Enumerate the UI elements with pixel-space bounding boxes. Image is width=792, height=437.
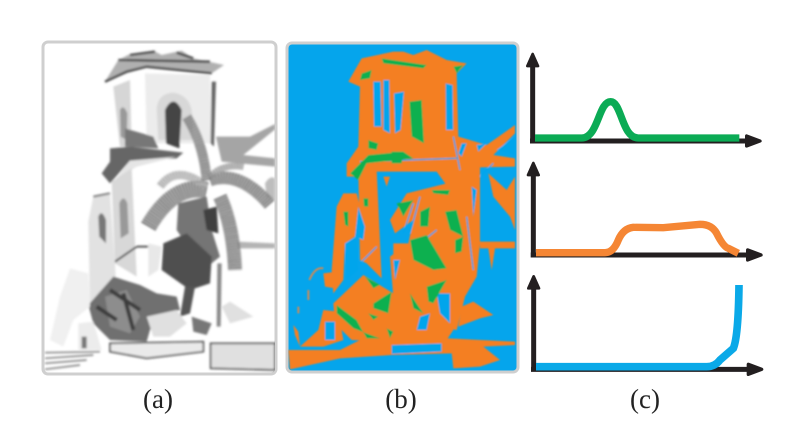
panel a: grayscale watercolor of church tower and palm bbox=[43, 42, 276, 374]
label b: (b) bbox=[385, 384, 417, 414]
chart: blue rising curve on axes bbox=[528, 276, 762, 374]
label c: (c) bbox=[630, 384, 660, 414]
chart: orange plateau curve on axes bbox=[528, 163, 761, 260]
label a: (a) bbox=[143, 384, 173, 414]
chart: green peak curve on axes bbox=[527, 54, 760, 146]
panel b: segmentation map in blue, orange and green bbox=[287, 43, 518, 372]
